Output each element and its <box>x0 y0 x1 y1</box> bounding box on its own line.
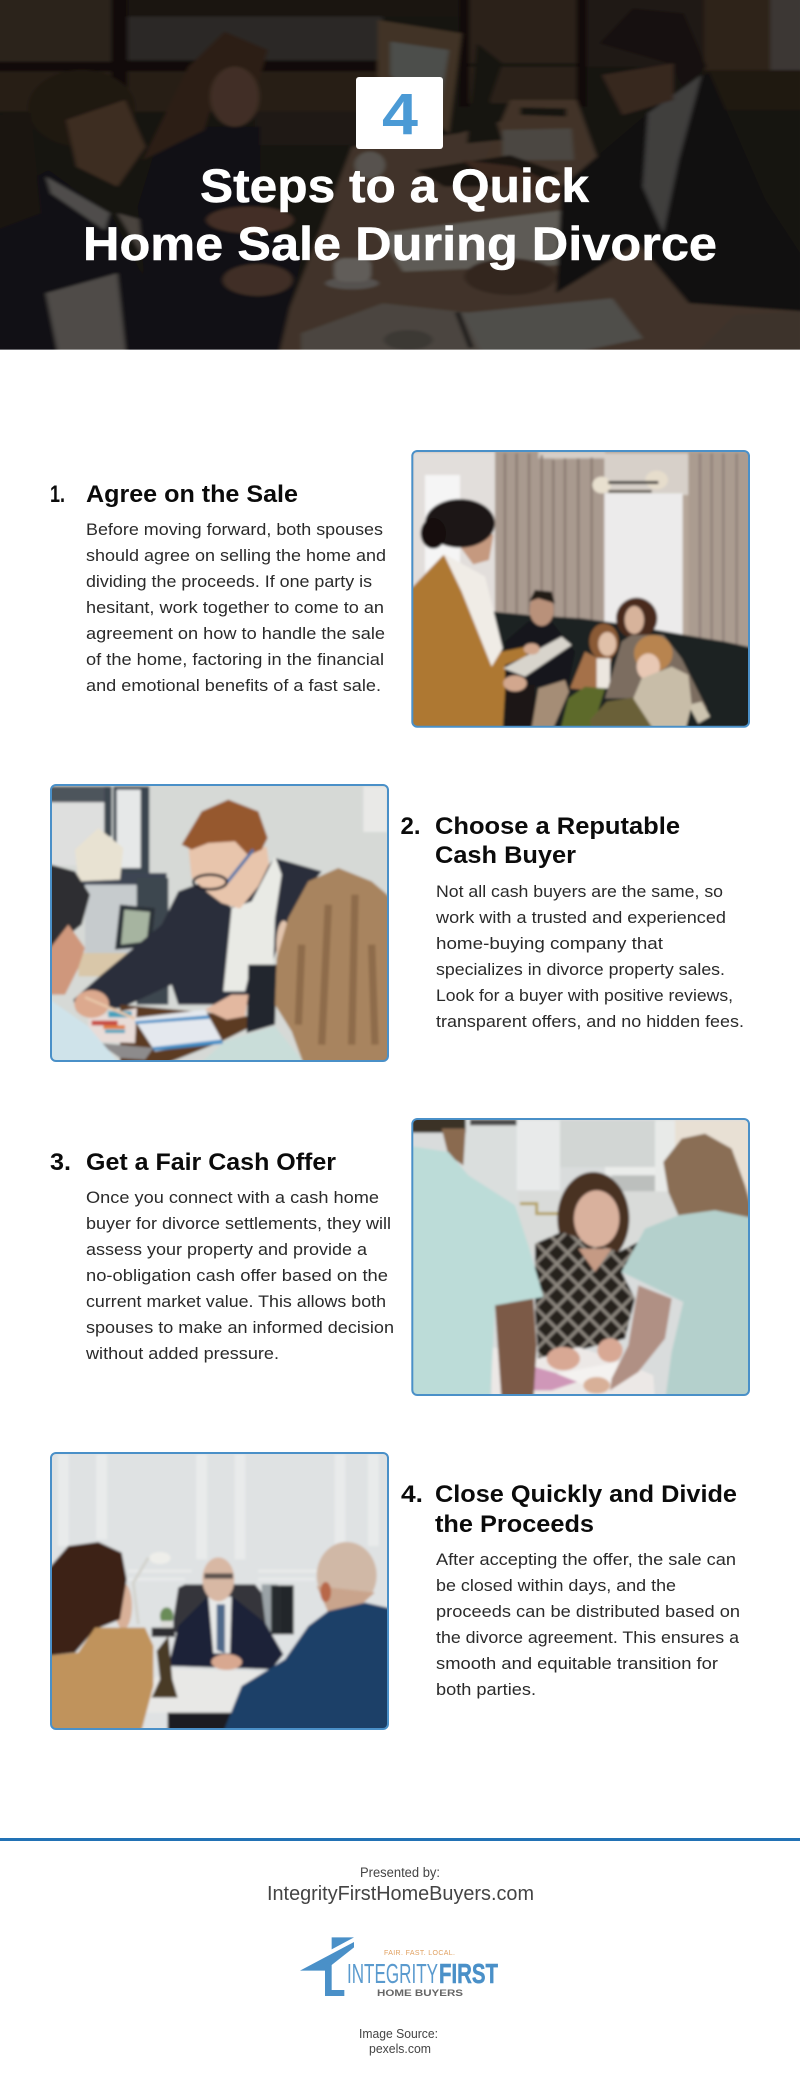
logo: HOME BUYERS <box>377 1988 463 1999</box>
number badge <box>356 77 443 149</box>
right woman <box>663 1134 755 1219</box>
step 2 panel <box>45 778 744 1068</box>
chair <box>173 1584 267 1633</box>
step 2 heading <box>400 813 680 869</box>
step 1 panel <box>50 445 755 735</box>
step 2 body text: work with a trusted and experienced <box>435 909 726 927</box>
step 2 body text: Look for a buyer with positive reviews, <box>436 987 733 1005</box>
step 2 heading: 2. <box>400 813 420 840</box>
step 1 body text: dividing the proceeds. If one party is <box>86 573 372 591</box>
logo: FAIR. FAST. LOCAL. <box>384 1950 455 1957</box>
step 3 panel <box>50 1112 755 1402</box>
table <box>148 1671 258 1712</box>
left person <box>52 863 92 948</box>
step 4 body text <box>436 1551 740 1699</box>
step 1 body text: of the home, factoring in the financial <box>86 651 384 669</box>
step 2 body text <box>435 883 744 1031</box>
step 3 body text: spouses to make an informed decision <box>86 1319 394 1337</box>
step 4 body text: After accepting the offer, the sale can <box>436 1551 736 1569</box>
center woman <box>557 1172 629 1265</box>
step 1 body text: hesitant, work together to come to an <box>86 599 384 617</box>
step 4 body text: both parties. <box>436 1681 536 1699</box>
icon: house roof <box>300 1937 354 1996</box>
center man <box>168 1596 283 1669</box>
face <box>188 838 269 909</box>
step 2 heading: Cash Buyer <box>435 842 576 869</box>
step 4 heading <box>401 1481 737 1538</box>
woman <box>616 598 657 639</box>
step 4 body text: smooth and equitable transition for <box>436 1655 719 1673</box>
step 1 body text: agreement on how to handle the sale <box>86 625 385 643</box>
step 1 body text: should agree on selling the home and <box>86 547 386 565</box>
step 2 photo <box>45 778 395 1068</box>
step 4 photo <box>45 1446 395 1736</box>
step 3 body text: current market value. This allows both <box>86 1293 386 1311</box>
step 4 heading: 4. <box>401 1481 423 1508</box>
image source: Image Source: <box>359 2026 438 2041</box>
number badge: 4 <box>382 82 418 147</box>
step 4 heading: Close Quickly and Divide <box>435 1481 737 1508</box>
left woman <box>115 1583 132 1629</box>
step 4 panel <box>45 1446 740 1736</box>
step 2 body text: Not all cash buyers are the same, so <box>436 883 723 901</box>
step 3 body text: buyer for divorce settlements, they will <box>86 1215 391 1233</box>
step 3 body text <box>85 1189 394 1363</box>
step 4 body text: the divorce agreement. This ensures a <box>436 1629 740 1647</box>
step 1 body text <box>86 521 386 695</box>
title <box>83 159 717 270</box>
girl <box>589 623 619 660</box>
table <box>492 1347 655 1402</box>
presented by: Presented by: <box>360 1865 440 1880</box>
right man <box>317 1542 377 1609</box>
step 3 heading: Get a Fair Cash Offer <box>86 1149 336 1176</box>
title: Steps to a Quick <box>200 159 590 212</box>
step 4 body text: proceeds can be distributed based on <box>436 1603 740 1621</box>
step 1 heading: 1. <box>50 481 65 508</box>
step 3 photo <box>405 1112 755 1402</box>
hero banner <box>0 0 800 370</box>
lamp <box>149 1552 171 1564</box>
logo: INTEGRITY <box>347 1958 438 1989</box>
step 1 body text: and emotional benefits of a fast sale. <box>86 677 381 695</box>
chandelier <box>592 477 611 493</box>
man suit <box>73 858 322 1011</box>
image source: pexels.com <box>369 2041 431 2056</box>
step 2 body text: home-buying company that <box>436 935 663 953</box>
lawyer <box>405 555 527 735</box>
step 3 body text: without added pressure. <box>85 1345 279 1363</box>
right man <box>556 72 800 313</box>
step 3 body text: assess your property and provide a <box>86 1241 368 1259</box>
step 1 heading: Agree on the Sale <box>86 481 298 508</box>
left man <box>413 1120 468 1134</box>
step 4 body text: be closed within days, and the <box>436 1577 676 1595</box>
step 2 body text: specializes in divorce property sales. <box>436 961 725 979</box>
step 2 heading: Choose a Reputable <box>435 813 680 840</box>
man <box>505 622 575 688</box>
binders <box>262 1584 278 1634</box>
footer <box>0 1838 800 2056</box>
step 3 heading: 3. <box>50 1149 71 1176</box>
left man <box>43 175 120 272</box>
logo: FIRST <box>439 1958 498 1989</box>
logo <box>300 1937 498 1999</box>
step 2 body text: transparent offers, and no hidden fees. <box>436 1013 744 1031</box>
table <box>120 1005 248 1068</box>
title: Home Sale During Divorce <box>83 217 717 270</box>
image source <box>359 2026 438 2056</box>
left woman <box>138 127 288 350</box>
website: IntegrityFirstHomeBuyers.com <box>267 1883 534 1905</box>
right person <box>205 1028 301 1060</box>
step 3 body text: Once you connect with a cash home <box>86 1189 379 1207</box>
step 3 body text: no-obligation cash offer based on the <box>86 1267 388 1285</box>
step 1 body text: Before moving forward, both spouses <box>86 521 383 539</box>
step 4 heading: the Proceeds <box>435 1511 594 1538</box>
sofa <box>488 612 755 735</box>
step 1 photo <box>405 445 755 735</box>
hero background photo <box>0 0 800 370</box>
child <box>634 635 673 672</box>
